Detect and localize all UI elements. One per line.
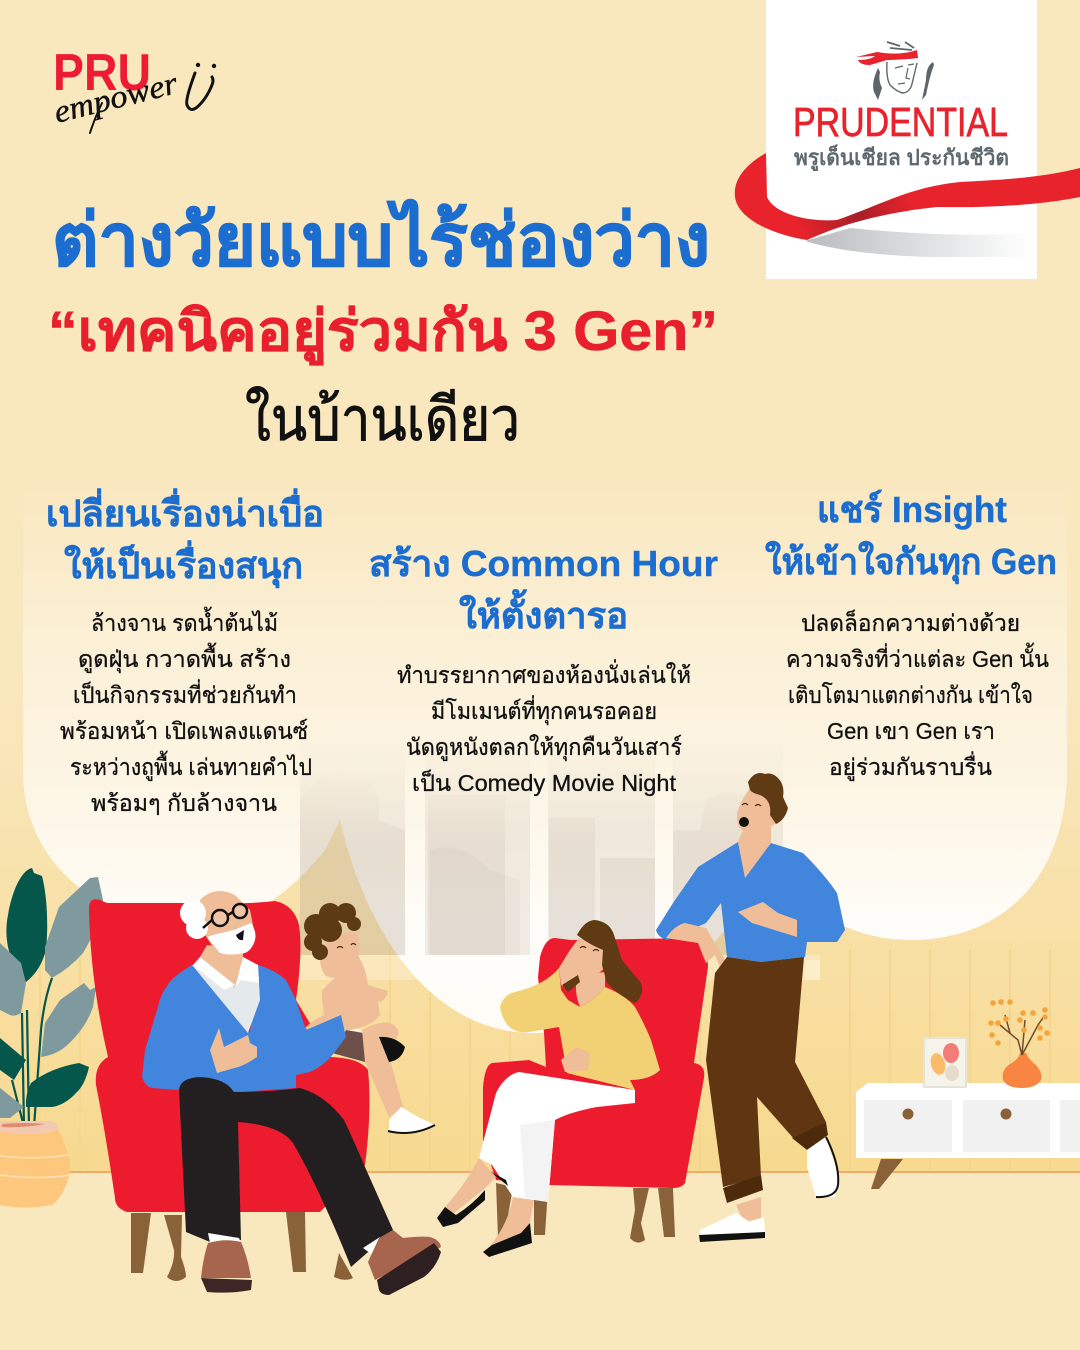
column 3: share insight: ปลดล็อกความต่างด้วย bbox=[801, 608, 1020, 636]
ribbon shadow bbox=[805, 228, 1030, 257]
armchair: left bbox=[89, 899, 369, 1281]
window with city view bbox=[300, 725, 820, 980]
column 1: make chores fun: เป็นกิจกรรมที่ช่วยกันทำ bbox=[73, 679, 297, 708]
picture frame bbox=[924, 1038, 966, 1087]
column 1: make chores fun: เปลี่ยนเรื่องน่าเบื่อ bbox=[46, 488, 324, 534]
column 2: common hour: ทำบรรยากาศของห้องนั่งเล่นให้ bbox=[397, 659, 691, 688]
column 1: make chores fun: ระหว่างถูพื้น เล่นทายคำไป bbox=[70, 751, 312, 781]
side table bbox=[856, 1083, 1080, 1189]
column 2: common hour: เป็น Comedy Movie Night bbox=[412, 768, 677, 796]
title: “เทคนิคอยู่ร่วมกัน 3 Gen” bbox=[48, 299, 718, 366]
title: ต่างวัยแบบไร้ช่องว่าง bbox=[52, 198, 710, 281]
column 2: common hour: สร้าง Common Hour bbox=[369, 543, 718, 584]
column 3: share insight: อยู่ร่วมกันราบรื่น bbox=[829, 751, 992, 781]
logo: Prudential card: พรูเด็นเชียล ประกันชีวิต bbox=[794, 143, 1009, 172]
title: ในบ้านเดียว bbox=[245, 386, 520, 453]
person: mother bbox=[437, 920, 660, 1257]
column 2: common hour bbox=[369, 543, 718, 796]
logo: Pru Empower U: PRU bbox=[53, 44, 151, 102]
column 3: share insight: ความจริงที่ว่าแต่ละ Gen นั้น bbox=[786, 643, 1049, 672]
column 2: common hour: มีโมเมนต์ที่ทุกคนรอคอย bbox=[431, 695, 657, 725]
column 3: share insight: เติบโตมาแตกต่างกัน เข้าใจ bbox=[788, 682, 1033, 708]
column 3: share insight: Gen เขา Gen เรา bbox=[827, 718, 995, 744]
column 1: make chores fun: ล้างจาน รดน้ำต้นไม้ bbox=[91, 607, 278, 636]
icon: Prudence head bbox=[856, 42, 934, 100]
flower vase bbox=[988, 999, 1050, 1088]
wall with vertical panelling bbox=[0, 690, 1080, 1173]
column 3: share insight: แชร์ Insight bbox=[817, 489, 1007, 530]
column 1: make chores fun: พร้อมหน้า เปิดเพลงแดนซ์ bbox=[60, 718, 308, 744]
column 1: make chores fun bbox=[46, 488, 324, 816]
column 3: share insight: ให้เข้าใจกันทุก Gen bbox=[765, 540, 1057, 585]
armchair: middle bbox=[483, 938, 708, 1243]
person: boy bbox=[304, 903, 435, 1133]
logo: Pru Empower U bbox=[50, 44, 216, 133]
plant pot bbox=[0, 1121, 70, 1208]
red ribbon bbox=[735, 153, 1080, 240]
panel: white cloud backdrop bbox=[23, 470, 1067, 1033]
logo: Pru Empower U: empower bbox=[50, 64, 182, 130]
title bbox=[48, 198, 718, 453]
column 2: common hour: นัดดูหนังตลกให้ทุกคืนวันเสาร์ bbox=[406, 734, 682, 761]
column 3: share insight bbox=[765, 489, 1057, 781]
column 2: common hour: ให้ตั้งตารอ bbox=[459, 589, 628, 636]
column 1: make chores fun: ดูดฝุ่น กวาดพื้น สร้าง bbox=[78, 643, 291, 673]
person: grandfather bbox=[142, 891, 441, 1295]
logo: Prudential card: PRUDENTIAL bbox=[793, 99, 1008, 145]
column 1: make chores fun: พร้อมๆ กับล้างจาน bbox=[91, 790, 277, 816]
plant bbox=[0, 868, 103, 1127]
logo: Prudential card bbox=[735, 0, 1080, 279]
person: father bbox=[656, 773, 845, 1242]
column 1: make chores fun: ให้เป็นเรื่องสนุก bbox=[64, 540, 303, 589]
